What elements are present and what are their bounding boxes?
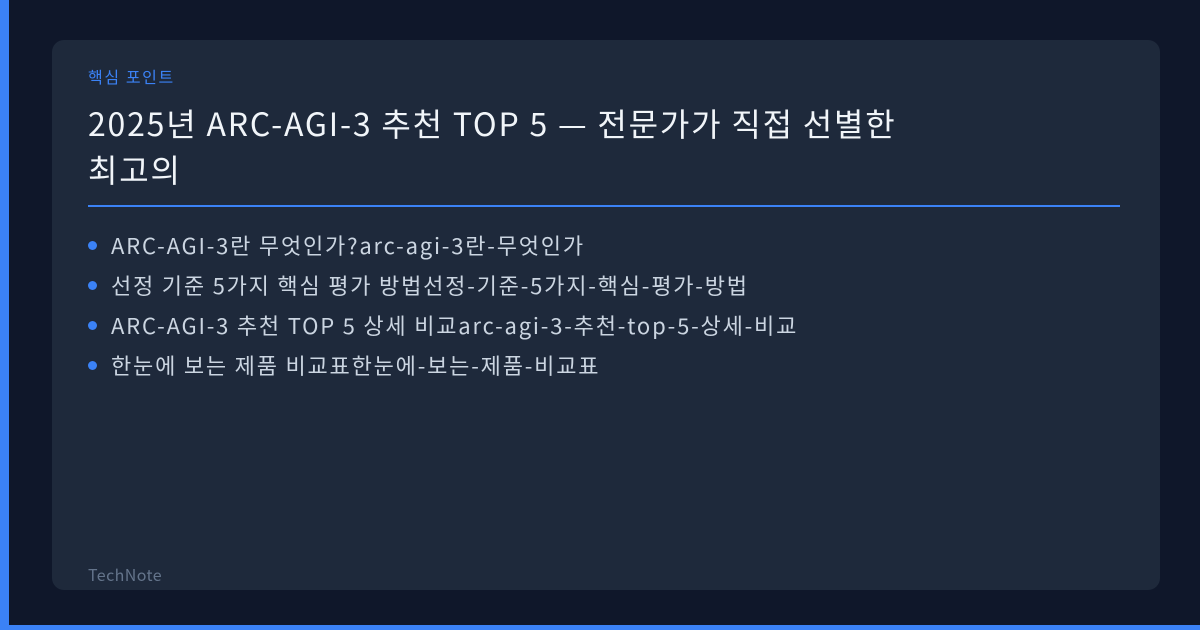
title: 2025년 ARC-AGI-3 추천 TOP 5 — 전문가가 직접 선별한 — [88, 100, 896, 146]
left accent bar — [0, 0, 9, 630]
bullet item 4: 한눈에 보는 제품 비교표한눈에-보는-제품-비교표 — [111, 349, 600, 381]
bullet list — [88, 229, 798, 381]
bottom accent bar — [0, 625, 1200, 630]
bullet item 2: 선정 기준 5가지 핵심 평가 방법선정-기준-5가지-핵심-평가-방법 — [111, 269, 749, 301]
bullet item 1: ARC-AGI-3란 무엇인가?arc-agi-3란-무엇인가 — [111, 229, 585, 261]
title: 최고의 — [88, 146, 182, 192]
footer brand: TechNote — [88, 562, 162, 586]
kicker label: 핵심 포인트 — [88, 64, 175, 88]
title — [88, 100, 896, 192]
bullet item 3: ARC-AGI-3 추천 TOP 5 상세 비교arc-agi-3-추천-top-5-상세-비교 — [111, 309, 798, 341]
